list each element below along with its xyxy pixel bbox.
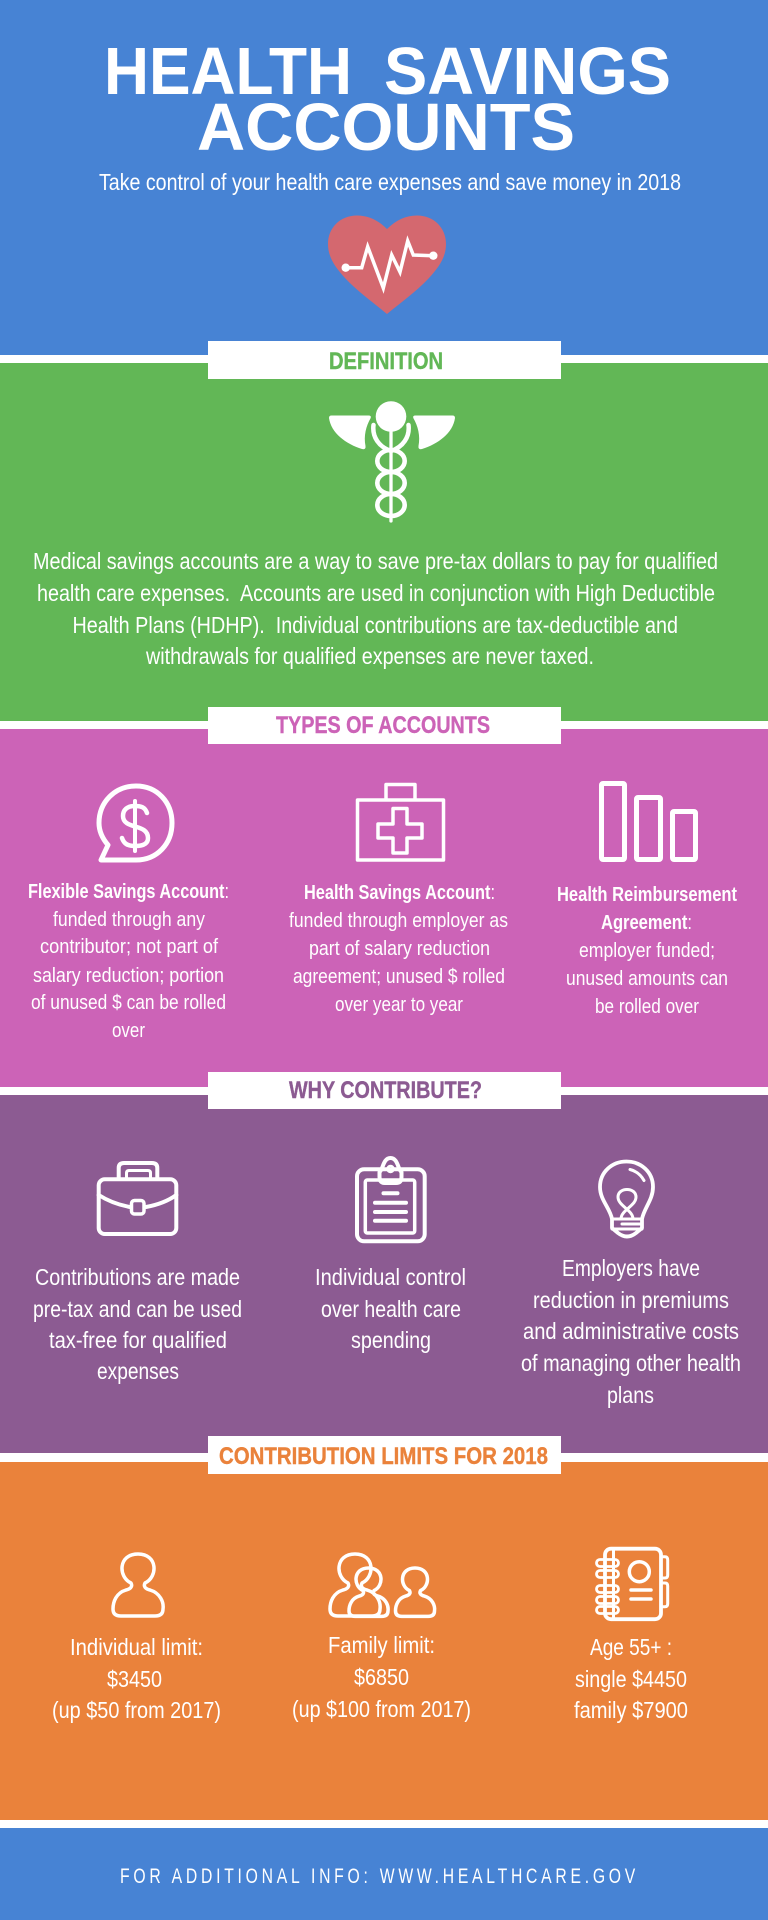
icon: light bulb: [600, 1162, 653, 1236]
text: employer savings: plans: [607, 1382, 654, 1408]
column: family limit: [292, 1554, 471, 1722]
text: flexible savings account: of unused $ can be rolled: [31, 992, 226, 1014]
text: flexible savings account: funded through any: [53, 909, 205, 931]
text: flexible savings account: [28, 881, 229, 1042]
title: [104, 34, 671, 165]
title: HEALTH: [104, 34, 352, 109]
column: flexible savings account: [28, 786, 229, 1042]
icon: clipboard: [357, 1158, 425, 1241]
text: health reimbursement agreement: unused amounts can: [566, 968, 728, 990]
text: age 55+ limit: [574, 1634, 688, 1723]
text: individual limit: (up $50 from 2017): [52, 1697, 221, 1723]
text: family limit: [292, 1632, 471, 1722]
text: individual control: over health care: [321, 1296, 461, 1322]
heading: definition: DEFINITION: [329, 348, 443, 375]
text: health reimbursement agreement: employer funded;: [579, 940, 715, 962]
text: health savings account: [289, 882, 508, 1016]
text: health reimbursement agreement: [557, 884, 737, 1018]
icon: briefcase: [99, 1163, 176, 1234]
text: employer savings: and administrative costs: [523, 1318, 739, 1344]
text: pre-tax contributions: expenses: [97, 1358, 179, 1384]
heading: contribution limits: CONTRIBUTION LIMITS FOR 2018: [219, 1443, 548, 1470]
text: age 55+ limit: family $7900: [574, 1697, 688, 1723]
text: family limit: $6850: [354, 1664, 409, 1690]
text: health reimbursement agreement: be rolled over: [595, 996, 699, 1018]
icon: address book: [596, 1549, 668, 1619]
heading: types of accounts: TYPES OF ACCOUNTS: [276, 712, 490, 739]
text: employer savings: of managing other health: [521, 1350, 741, 1376]
icon: dollar speech bubble: [99, 786, 172, 860]
text: age 55+ limit: Age 55+ :: [590, 1634, 672, 1660]
title: ACCOUNTS: [197, 90, 575, 165]
text: individual limit: $3450: [107, 1666, 162, 1692]
text: health savings account: part of salary reduction: [309, 938, 490, 960]
column: employer savings: [521, 1162, 741, 1408]
icon: medical kit: [358, 784, 444, 860]
text: employer savings: Employers have: [562, 1255, 700, 1281]
text: flexible savings account: Flexible Savings Account:: [28, 881, 229, 903]
column: age 55+ limit: [574, 1549, 688, 1723]
column: health savings account: [289, 784, 508, 1016]
text: individual control: spending: [351, 1327, 431, 1353]
panel: why contribute: [0, 1095, 768, 1453]
text block: definition: Health Plans (HDHP). Individual contributions are tax-deductible and: [72, 612, 678, 638]
text: flexible savings account: over: [112, 1020, 145, 1042]
text: health savings account: over year to year: [335, 994, 463, 1016]
icon: caduceus: [329, 401, 455, 521]
text: pre-tax contributions: [33, 1264, 242, 1384]
heading: why contribute: WHY CONTRIBUTE?: [289, 1077, 482, 1104]
text: individual control: [315, 1264, 466, 1353]
icon: family: [330, 1554, 435, 1616]
subtitle: Take control of your health care expenses and save money in 2018: [99, 169, 681, 195]
text: employer savings: [521, 1255, 741, 1408]
text: flexible savings account: salary reduction; portion: [33, 965, 224, 987]
panel: header: [0, 0, 768, 355]
panel: definition: [0, 363, 768, 721]
text: pre-tax contributions: Contributions are made: [35, 1264, 240, 1290]
column: individual control: [315, 1158, 466, 1353]
text block: definition: [33, 548, 718, 669]
icon: person: [113, 1554, 163, 1616]
text: family limit: (up $100 from 2017): [292, 1696, 471, 1722]
text: age 55+ limit: single $4450: [575, 1666, 687, 1692]
text: pre-tax contributions: pre-tax and can be used: [33, 1296, 242, 1322]
column: individual limit: [52, 1554, 221, 1723]
text: pre-tax contributions: tax-free for qualified: [49, 1327, 227, 1353]
panel: footer: [0, 1828, 768, 1920]
heading: why contribute: [208, 1072, 561, 1109]
panel: types of accounts: [0, 729, 768, 1087]
text: health savings account: Health Savings Account:: [304, 882, 495, 904]
text: health savings account: agreement; unused $ rolled: [293, 966, 505, 988]
title: SAVINGS: [384, 34, 671, 109]
text: health savings account: funded through employer as: [289, 910, 508, 932]
column: pre-tax contributions: [33, 1163, 242, 1384]
icon: bar chart: [602, 784, 696, 860]
text block: definition: withdrawals for qualified expenses are never taxed.: [145, 643, 594, 669]
text: health reimbursement agreement: Agreement:: [601, 912, 692, 934]
text: individual limit: [52, 1634, 221, 1723]
heading: contribution limits: [208, 1436, 561, 1474]
text: flexible savings account: contributor; not part of: [40, 936, 218, 958]
text: individual control: Individual control: [315, 1264, 466, 1290]
heading: types of accounts: [208, 707, 561, 744]
icon: heart with pulse: [328, 216, 446, 314]
heading: definition: [208, 341, 561, 379]
text: family limit: Family limit:: [328, 1632, 435, 1658]
column: health reimbursement agreement: [557, 784, 737, 1018]
panel: contribution limits: [0, 1462, 768, 1820]
text: employer savings: reduction in premiums: [533, 1287, 729, 1313]
text: individual limit: Individual limit:: [70, 1634, 203, 1660]
